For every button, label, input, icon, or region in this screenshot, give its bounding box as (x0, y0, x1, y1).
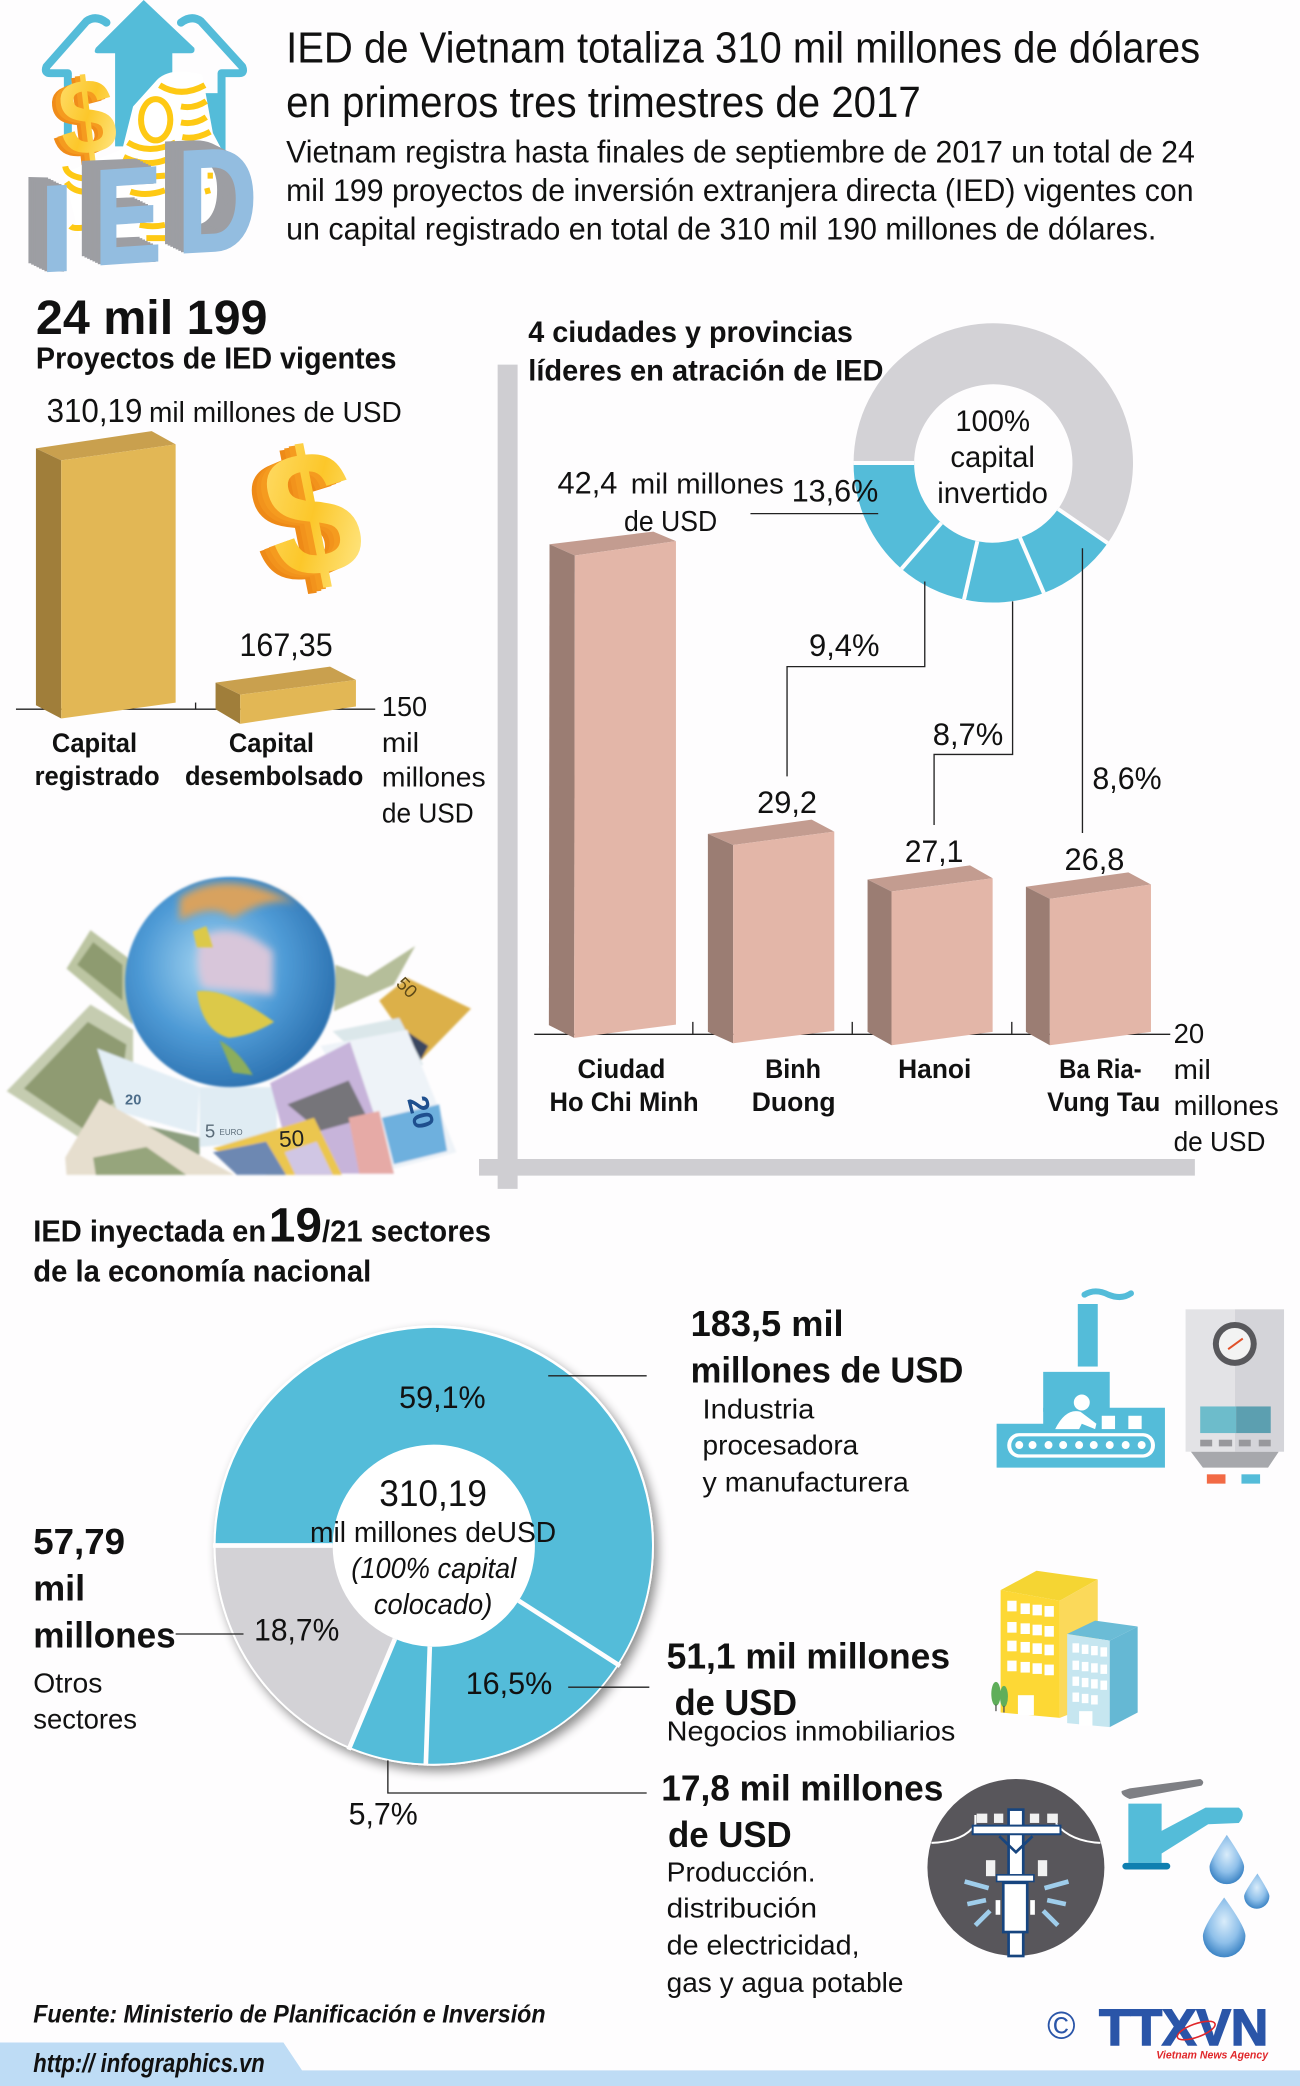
callout: other sectors: millones (33, 1614, 176, 1655)
bar: Ba Ria-Vung Tau (1026, 872, 1151, 1045)
callout: utilities: de USD (668, 1814, 792, 1855)
logo: copyright and TTXVN: © (1047, 2004, 1076, 2047)
letter E extrusion: E (89, 138, 156, 292)
letter D extrusion: D (166, 111, 247, 279)
axis label: mil (382, 727, 419, 758)
slice: manufacturing 59.1% (216, 1328, 652, 1664)
banknote: light note right (333, 1018, 423, 1080)
section heading: sectors: 19 (269, 1199, 322, 1252)
value: disbursed capital: 167,35 (240, 626, 333, 663)
banknote: euro 5 (200, 1087, 277, 1147)
banknote: yellow 50 top right (379, 978, 471, 1060)
footer url: http:// infographics.vn (33, 2050, 265, 2078)
icon: 3D letters IED (21, 108, 257, 297)
callout: manufacturing: y manufacturera (703, 1467, 909, 1498)
axis label (382, 691, 486, 828)
callout: manufacturing: 183,5 mil (691, 1303, 844, 1344)
letter I extrusion (21, 151, 71, 297)
category labels: Ho Chi Minh (550, 1087, 699, 1117)
category label: disbursed (185, 727, 363, 791)
callout: other sectors: 57,79 (33, 1521, 125, 1562)
donut labels: 59,1% (399, 1379, 486, 1415)
letter E extrusion: E (79, 132, 145, 286)
letter I extrusion: I (27, 154, 61, 291)
panel: leading provinces (528, 317, 1279, 1157)
heading: projects label: Proyectos de IED vigentes (36, 342, 397, 376)
category labels (550, 1054, 1160, 1117)
callout: utilities: Producción. (667, 1856, 816, 1887)
bar: Ciudad Ho Chi Minh (549, 532, 676, 1038)
leader lines (176, 1376, 649, 1793)
share labels: 8,6% (1092, 760, 1162, 796)
banknote: euro 20 blue (321, 1030, 456, 1170)
callout: manufacturing: procesadora (703, 1429, 859, 1460)
banknote: euro 20 (97, 1049, 200, 1134)
bar: disbursed capital (216, 667, 356, 724)
banknote denominations: 20 (125, 1092, 141, 1108)
bar values (757, 784, 1124, 877)
logo: copyright and TTXVN: Vietnam News Agency (1156, 2049, 1269, 2061)
title: IED de Vietnam totaliza 310 mil millones de dólares (286, 25, 1200, 73)
bar: Hanoi (868, 865, 993, 1045)
axis label: de USD (382, 797, 474, 828)
axis label: de USD (1174, 1126, 1265, 1157)
callout: utilities (661, 1767, 943, 1998)
axis label (1174, 1018, 1279, 1157)
share labels: 8,7% (933, 716, 1003, 752)
panel: projects and capital (16, 292, 486, 828)
letter D extrusion: D (164, 110, 244, 278)
intro text block (286, 133, 1195, 247)
heading (528, 317, 884, 388)
value: Ho Chi Minh: de USD (624, 506, 717, 538)
letters front faces (40, 116, 257, 297)
share labels (792, 473, 1162, 796)
value: Ho Chi Minh: mil millones (631, 469, 784, 501)
banknote: purple (270, 1042, 394, 1174)
donut center label: 100% (955, 406, 1030, 438)
donut labels: 5,7% (349, 1795, 418, 1831)
letter D extrusion: D (158, 108, 239, 275)
letter E extrusion: E (81, 134, 148, 288)
icon: coins (64, 72, 224, 253)
letter E extrusion: E (84, 135, 151, 289)
category label: registered: registrado (35, 760, 160, 791)
banknote denominations: 50 (278, 1126, 305, 1152)
icon: small 3D dollar: $ (44, 58, 114, 183)
slice: other sectors 18.7% (216, 1546, 395, 1747)
text: source: Fuente: Ministerio de Planificación e Inversión (33, 2001, 546, 2029)
callout: real estate: de USD (675, 1682, 797, 1723)
donut center label: capital (950, 442, 1035, 474)
donut center label: 310,19 (379, 1472, 487, 1514)
bar chart: capital (16, 431, 375, 724)
section heading: sectors: de la economía nacional (33, 1254, 371, 1288)
category labels: Ba Ria- (1059, 1054, 1142, 1084)
intro text block: Vietnam registra hasta finales de septiembre de 2017 un total de 24 (286, 133, 1195, 169)
bar: registered capital (36, 431, 176, 719)
icon: factory (997, 1291, 1165, 1468)
donut center label: mil millones deUSD (310, 1517, 556, 1549)
letters front faces: I (40, 159, 74, 297)
icon: large 3D dollar: $ (238, 414, 367, 623)
banknote denominations: 50 (392, 973, 422, 1002)
callout: other sectors: sectores (33, 1703, 137, 1734)
donut center label: (100% capital (351, 1553, 517, 1585)
banknote: green top left (67, 930, 133, 1025)
callout: manufacturing: millones de USD (691, 1350, 963, 1391)
letter I extrusion: I (24, 152, 58, 290)
value: registered capital: mil millones de USD (149, 397, 402, 429)
callout: utilities: de electricidad, (667, 1930, 860, 1961)
bar values: 27,1 (905, 833, 963, 869)
category label: registered: Capital (52, 727, 137, 758)
value: Ho Chi Minh (558, 465, 784, 538)
icon: large 3D dollar: $ (248, 410, 377, 618)
footer band (0, 2042, 1300, 2086)
icon: boiler (1186, 1309, 1284, 1484)
value: registered capital (47, 393, 402, 430)
heading: 4 ciudades y provincias (528, 317, 853, 349)
donut labels: 18,7% (254, 1612, 339, 1648)
icon: electricity pole (927, 1779, 1104, 1956)
donut labels (254, 1379, 552, 1831)
donut chart: sectors (213, 1325, 654, 1766)
letters front faces: E (94, 139, 161, 294)
letter I extrusion: I (37, 159, 71, 297)
slice: real estate 16.5% (426, 1601, 617, 1764)
letter D extrusion: D (174, 115, 255, 283)
icon: buildings (991, 1571, 1138, 1727)
banknote: beige bottom left (65, 1099, 234, 1175)
letter E extrusion: E (86, 136, 153, 290)
icon: large 3D dollar: $ (233, 416, 362, 625)
banknote: green lower left (7, 1005, 133, 1147)
donut labels: 16,5% (466, 1665, 552, 1701)
callout: manufacturing: Industria (703, 1393, 815, 1424)
category labels: Vung Tau (1047, 1087, 1160, 1117)
callout: utilities: distribución (667, 1892, 817, 1923)
share labels: 9,4% (809, 627, 880, 663)
image: globe on banknotes (7, 877, 471, 1175)
callout: real estate (667, 1636, 955, 1746)
title: en primeros tres trimestres de 2017 (286, 79, 921, 127)
logo: copyright and TTXVN (1047, 1999, 1269, 2061)
callout: other sectors: mil (33, 1568, 85, 1609)
icon: large 3D dollar: $ (242, 412, 371, 621)
axis label: millones (382, 761, 486, 792)
value: Ho Chi Minh: 42,4 (558, 465, 617, 501)
callout: other sectors (33, 1521, 176, 1734)
axis label: mil (1174, 1054, 1211, 1085)
intro text block: un capital registrado en total de 310 mil 190 millones de dólares. (286, 211, 1156, 247)
category labels: Hanoi (898, 1054, 971, 1084)
axis label: millones (1174, 1090, 1279, 1121)
icon: small 3D dollar: $ (47, 57, 118, 182)
value: registered capital: 310,19 (47, 393, 142, 430)
globe (125, 877, 335, 1087)
callout: manufacturing (691, 1303, 963, 1498)
section heading: sectors: IED inyectada en (33, 1214, 266, 1248)
heading: project count: 24 mil 199 (36, 292, 267, 345)
icon: blue backing behind coins (200, 93, 225, 153)
letter D extrusion: D (161, 109, 241, 276)
decorative frame (479, 365, 1195, 1189)
title (286, 25, 1200, 127)
letter D extrusion: D (172, 114, 252, 282)
icon: central up arrow (95, 0, 195, 146)
bar values: 26,8 (1064, 841, 1124, 877)
donut chart: invested capital share (854, 323, 1133, 603)
letter D extrusion: D (169, 113, 249, 280)
donut center label (937, 406, 1048, 510)
category labels: Duong (752, 1087, 836, 1117)
banknote denominations: 20 (400, 1093, 440, 1132)
category label: disbursed: Capital (229, 727, 314, 758)
callout: utilities: 17,8 mil millones (661, 1767, 943, 1808)
bar chart: provinces (534, 532, 1170, 1045)
leader lines (750, 514, 1082, 833)
banknote denominations: EURO (220, 1128, 243, 1137)
category label: registered (35, 727, 160, 791)
icon: water faucet (1122, 1779, 1243, 1870)
share labels: 13,6% (792, 473, 878, 509)
icon: IED logo with arrows, coins and dollar (21, 0, 257, 297)
icon: house arrow outline (46, 18, 243, 150)
banknote denominations (125, 973, 440, 1152)
icon: water drops (1203, 1835, 1269, 1957)
letter E extrusion: E (76, 131, 143, 285)
intro text block: mil 199 proyectos de inversión extranjera directa (IED) vigentes con (286, 172, 1194, 208)
letter I extrusion: I (32, 156, 66, 294)
letter I extrusion: I (21, 151, 55, 289)
section heading: sectors (33, 1199, 491, 1288)
slice: utilities 5.7% (350, 1639, 430, 1764)
callout: other sectors: Otros (33, 1668, 102, 1699)
axis label: 150 (382, 691, 427, 722)
callout: real estate: 51,1 mil millones (667, 1636, 950, 1677)
axis label: 20 (1174, 1018, 1204, 1049)
bar values: 29,2 (757, 784, 817, 820)
icon: small 3D dollar: $ (52, 55, 123, 180)
heading: líderes en atración de IED (528, 356, 884, 388)
letter I extrusion: I (29, 155, 63, 293)
bar: Binh Duong (708, 820, 834, 1043)
banknote: yellow 50 bottom (213, 1118, 342, 1175)
donut center label: colocado) (374, 1589, 492, 1621)
donut center label (310, 1472, 556, 1621)
callout: real estate: Negocios inmobiliarios (667, 1715, 955, 1746)
letter I extrusion: I (35, 158, 69, 295)
banknote denominations: 5 (205, 1121, 215, 1142)
letters front faces: D (177, 116, 257, 284)
letter E extrusion: E (92, 139, 159, 293)
section heading: sectors: /21 sectores (322, 1214, 491, 1248)
category label: disbursed: desembolsado (185, 760, 363, 791)
banknote: green top right (334, 946, 415, 1011)
category labels: Binh (765, 1054, 821, 1084)
logo: copyright and TTXVN: TTXVN (1099, 1999, 1268, 2056)
callout: utilities: gas y agua potable (667, 1967, 903, 1998)
category labels: Ciudad (577, 1054, 665, 1084)
donut center label: invertido (937, 478, 1048, 510)
